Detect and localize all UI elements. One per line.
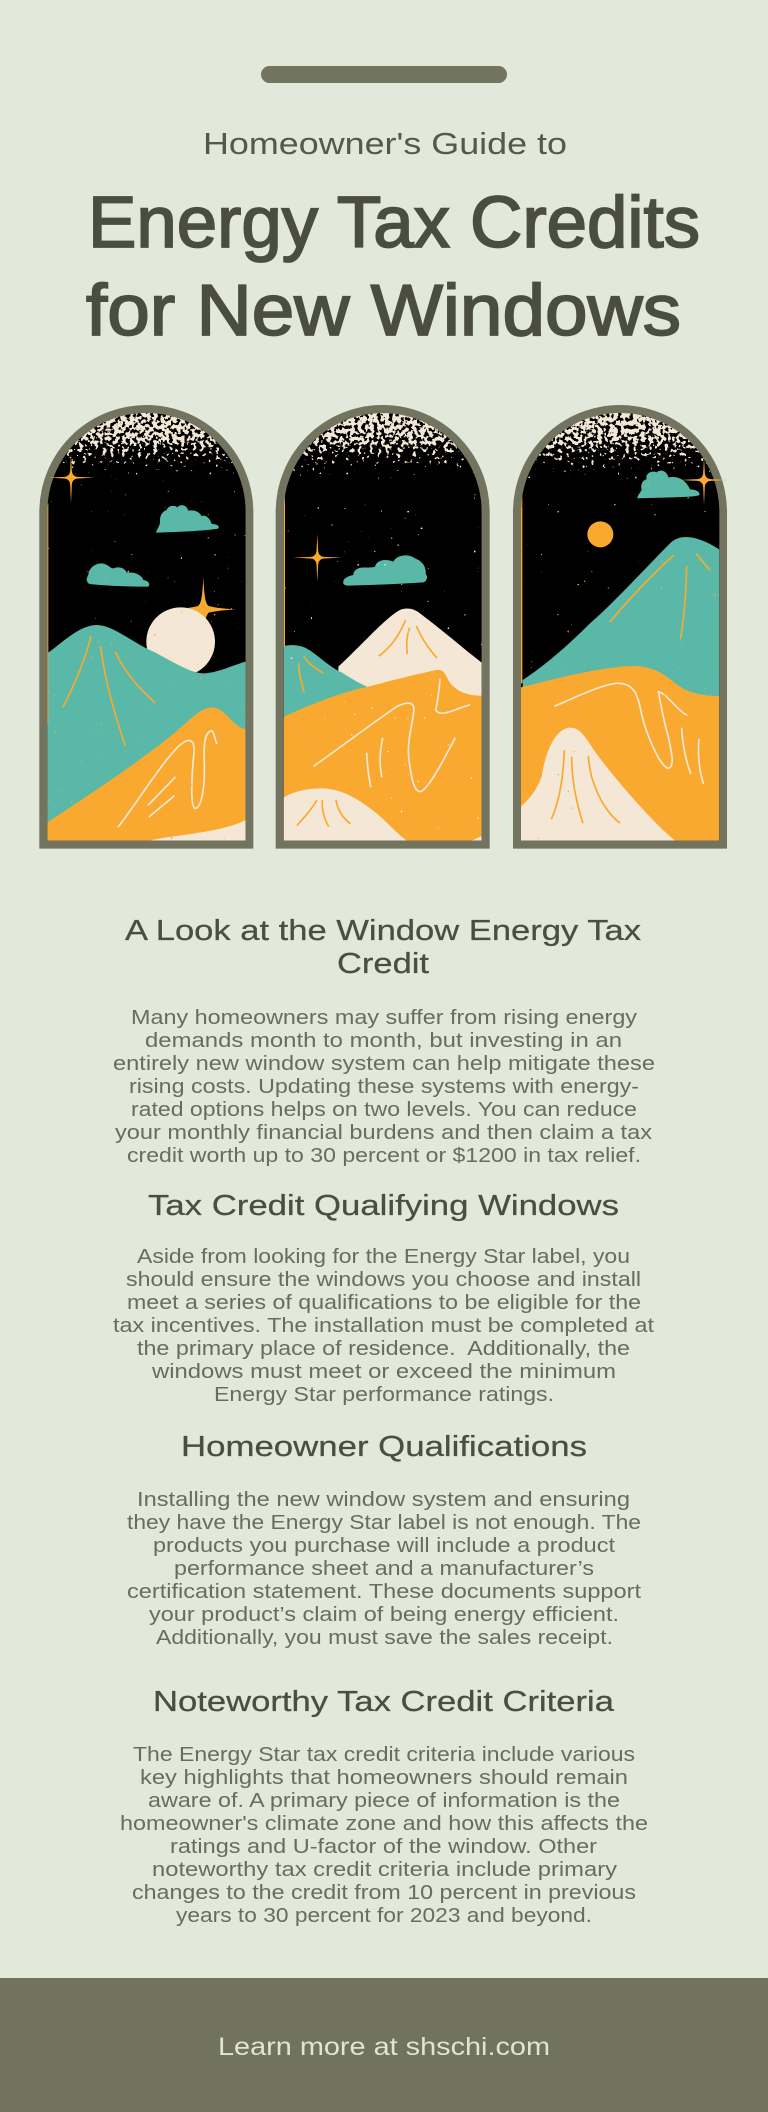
body text: qualifying windows: Energy Star performance ratings. (214, 1383, 554, 1406)
body text: tax credit criteria: key highlights that homeowners should remain (140, 1766, 628, 1789)
footer call to action: Learn more at shschi.com (218, 2033, 550, 2061)
body text: homeowner qualifications: performance sheet and a manufacturer’s (174, 1557, 594, 1580)
body text: window energy tax credit: entirely new window system can help mitigate these (113, 1052, 655, 1075)
subtitle: Homeowner's Guide to (203, 126, 567, 161)
title (86, 183, 700, 351)
body text: window energy tax credit: rising costs. Updating these systems with energy- (129, 1075, 639, 1098)
body text: qualifying windows: tax incentives. The installation must be completed at (113, 1314, 654, 1337)
body text: homeowner qualifications: Additionally, you must save the sales receipt. (156, 1626, 613, 1649)
body text: qualifying windows: meet a series of qualifications to be eligible for the (127, 1291, 641, 1314)
heading: A Look at the Window Energy Tax Credit: Credit (337, 948, 429, 980)
body text: tax credit criteria (120, 1743, 648, 1927)
body text: homeowner qualifications: your product’s claim of being energy efficient. (149, 1603, 619, 1626)
body text: tax credit criteria: aware of. A primary piece of information is the (148, 1789, 620, 1812)
body text: homeowner qualifications: they have the Energy Star label is not enough. The (127, 1511, 641, 1534)
heading: A Look at the Window Energy Tax Credit: A Look at the Window Energy Tax (125, 915, 641, 947)
body text: tax credit criteria: The Energy Star tax credit criteria include various (133, 1743, 635, 1766)
body text: tax credit criteria: noteworthy tax credit criteria include primary (152, 1858, 618, 1881)
heading: Tax Credit Qualifying Windows: Tax Credit Qualifying Windows (148, 1190, 619, 1222)
body text: qualifying windows: Aside from looking for the Energy Star label, you (137, 1245, 630, 1268)
body text: homeowner qualifications (127, 1488, 641, 1649)
body text: homeowner qualifications: Installing the new window system and ensuring (137, 1488, 630, 1511)
body text: tax credit criteria: homeowner's climate zone and how this affects the (120, 1812, 648, 1835)
decorative header bar (261, 66, 507, 83)
footer band (0, 1978, 768, 2112)
window illustration 3: teal peak with orange moon (513, 403, 728, 849)
body text: tax credit criteria: ratings and U-factor of the window. Other (170, 1835, 597, 1858)
body text: window energy tax credit: Many homeowners may suffer from rising energy (131, 1006, 638, 1029)
heading: A Look at the Window Energy Tax Credit (125, 915, 641, 980)
window illustration 2: cream mountain and orange dunes (276, 403, 490, 849)
title: for New Windows (86, 271, 681, 351)
body text: qualifying windows (113, 1245, 654, 1406)
body text: window energy tax credit: demands month to month, but investing in an (145, 1029, 622, 1052)
heading: Homeowner Qualifications: Homeowner Qualifications (181, 1431, 587, 1463)
window illustration 1: teal hills with cream moon (39, 403, 253, 849)
body text: tax credit criteria: changes to the credit from 10 percent in previous (132, 1881, 636, 1904)
body text: window energy tax credit: rated options helps on two levels. You can reduce (131, 1098, 637, 1121)
body text: qualifying windows: the primary place of residence. Additionally, the (137, 1337, 630, 1360)
body text: window energy tax credit: credit worth up to 30 percent or $1200 in tax relief. (127, 1144, 641, 1167)
body text: window energy tax credit: your monthly financial burdens and then claim a tax (115, 1121, 653, 1144)
body text: tax credit criteria: years to 30 percent for 2023 and beyond. (176, 1904, 592, 1927)
body text: homeowner qualifications: products you purchase will include a product (153, 1534, 615, 1557)
body text: homeowner qualifications: certification statement. These documents support (127, 1580, 641, 1603)
body text: qualifying windows: windows must meet or exceed the minimum (151, 1360, 616, 1383)
title: Energy Tax Credits (88, 183, 700, 263)
body text: window energy tax credit (113, 1006, 655, 1167)
body text: qualifying windows: should ensure the windows you choose and install (126, 1268, 641, 1291)
heading: Noteworthy Tax Credit Criteria: Noteworthy Tax Credit Criteria (153, 1686, 614, 1718)
